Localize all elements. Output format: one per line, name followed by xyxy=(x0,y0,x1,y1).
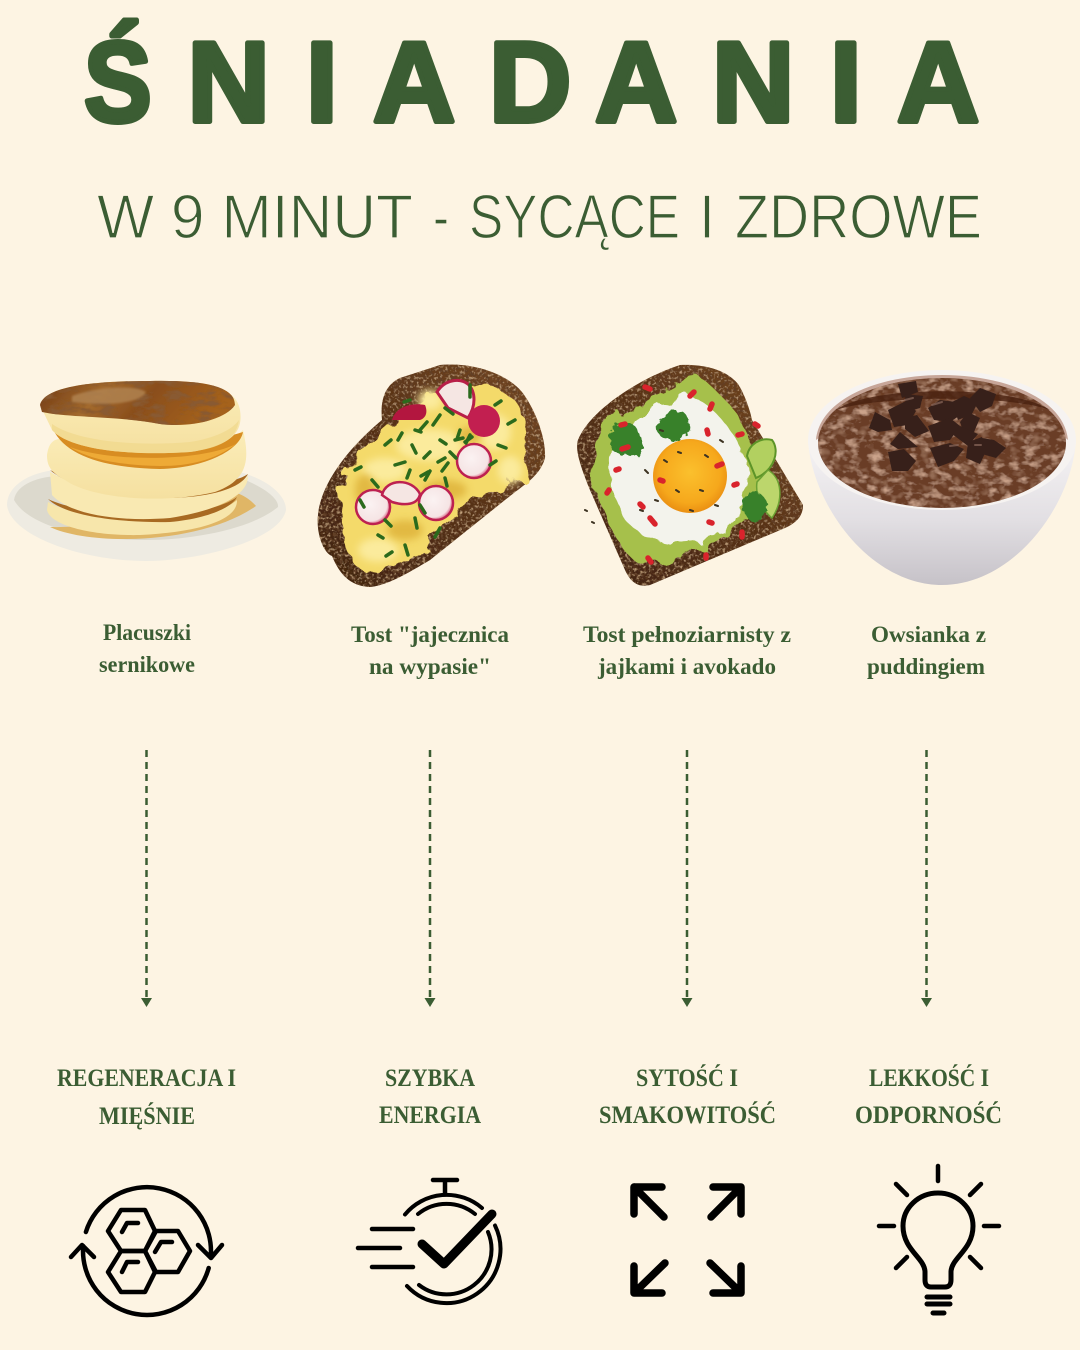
icon: light bulb xyxy=(879,1166,999,1313)
label: oatmeal: Owsianka z xyxy=(871,622,986,647)
label: egg toast: Tost "jajecznica xyxy=(351,622,509,647)
label: pancakes: sernikowe xyxy=(99,652,195,677)
subtitle: I xyxy=(699,183,715,252)
label: oatmeal xyxy=(867,622,986,679)
image: wholegrain toast with egg and avocado xyxy=(577,365,803,586)
benefit: quick energy xyxy=(379,1065,481,1129)
subtitle: SYCĄCE xyxy=(469,183,680,252)
label: avocado toast: Tost pełnoziarnisty z xyxy=(583,622,791,647)
arrow 4 xyxy=(921,750,932,1007)
arrow 3 xyxy=(682,750,692,1007)
subtitle xyxy=(97,183,982,252)
benefit: satiety and taste: SMAKOWITOŚĆ xyxy=(599,1101,776,1129)
radish slices xyxy=(356,380,500,524)
label: pancakes xyxy=(99,620,195,677)
subtitle: - xyxy=(433,183,449,252)
subtitle: ZDROWE xyxy=(735,183,982,252)
benefit: regeneration and muscles xyxy=(57,1065,236,1130)
scrambled egg xyxy=(338,385,527,572)
icon: cilantro leaves xyxy=(610,411,767,521)
title: Ś xyxy=(84,18,152,146)
label: avocado toast xyxy=(583,622,791,679)
label: avocado toast: jajkami i avokado xyxy=(597,654,776,679)
title: NIADANIA xyxy=(188,20,979,146)
arrow 2 xyxy=(424,750,436,1007)
benefit: quick energy: ENERGIA xyxy=(379,1102,481,1129)
label: oatmeal: puddingiem xyxy=(867,654,985,679)
image: chocolate pudding oatmeal bowl xyxy=(808,370,1076,585)
benefit: lightness and immunity xyxy=(855,1064,1002,1129)
benefit: satiety and taste: SYTOŚĆ I xyxy=(636,1064,738,1092)
image: scrambled egg toast with radish xyxy=(318,364,545,587)
benefit: regeneration and muscles: REGENERACJA I xyxy=(57,1065,236,1092)
icon: chocolate chunks xyxy=(869,381,1006,471)
benefit: lightness and immunity: LEKKOŚĆ I xyxy=(869,1064,989,1092)
arrow 1 xyxy=(141,750,152,1007)
icon: honeycomb regeneration cycle xyxy=(71,1187,222,1315)
label: pancakes: Placuszki xyxy=(103,620,192,645)
icon: expand arrows xyxy=(634,1187,741,1293)
image: cheese pancakes on plate xyxy=(7,381,286,561)
benefit: regeneration and muscles: MIĘŚNIE xyxy=(99,1102,195,1130)
subtitle: W 9 MINUT xyxy=(97,183,413,252)
benefit: lightness and immunity: ODPORNOŚĆ xyxy=(855,1101,1002,1129)
benefit: quick energy: SZYBKA xyxy=(385,1065,475,1092)
label: egg toast xyxy=(351,622,509,679)
icon: stopwatch with check mark xyxy=(358,1180,500,1303)
benefit: satiety and taste xyxy=(599,1064,776,1129)
label: egg toast: na wypasie" xyxy=(369,654,491,679)
